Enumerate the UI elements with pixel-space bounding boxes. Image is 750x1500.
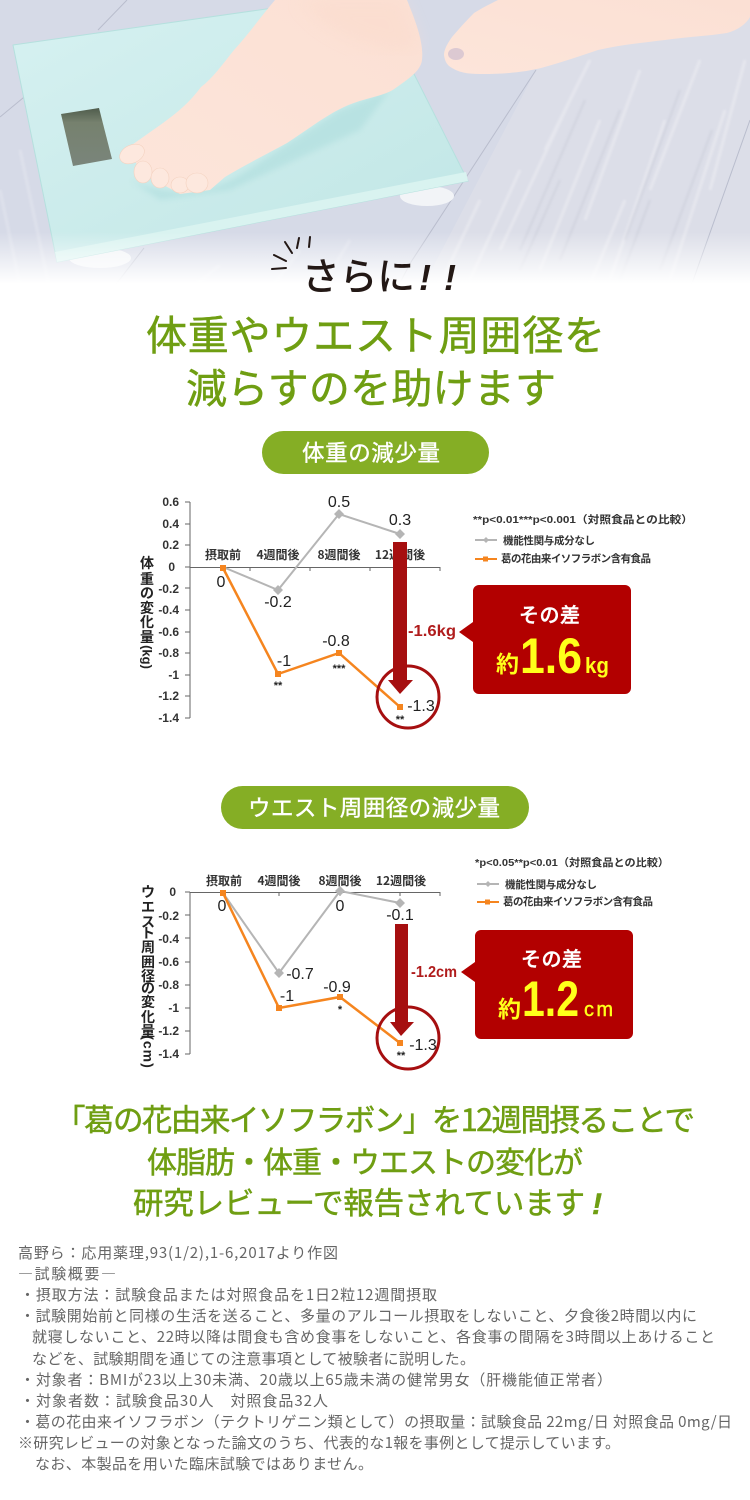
heading: さらに!!: !! [419,257,456,298]
y axis: 0.4 [162,517,179,531]
x axis: 4週間後 [256,546,300,563]
y axis title: 径 [141,966,155,986]
pill heading: body weight reduction: 体重の減少量 [302,436,440,468]
grey series: 0.5 [328,494,350,511]
y axis title [140,882,156,1069]
y axis title: 化 [140,612,154,632]
y axis title: ス [141,912,155,932]
y axis: -1 [168,1001,179,1015]
legend: waist: 機能性関与成分なし [505,878,597,891]
left foot [129,0,422,194]
legend: waist: *p<0.05**p<0.01（対照食品との比較） [475,856,669,869]
study notes text block: 高野ら：応用薬理,93(1/2),1-6,2017より作図 [18,1242,338,1263]
legend: body weight: 機能性関与成分なし [503,534,595,547]
x axis [190,546,440,571]
study notes text block: なお、本製品を用いた臨床試験ではありません。 [35,1453,373,1474]
callout: difference 1.6kg [459,585,631,694]
study notes text block: ・試験開始前と同様の生活を送ること、多量のアルコール摂取をしないこと、夕食後2時間以内に [20,1305,697,1326]
y axis: -0.4 [158,603,179,617]
y axis: -0.2 [158,582,179,596]
y axis title: 重 [140,569,154,589]
y axis: 0 [168,560,175,574]
orange series: -0.9 [323,979,351,996]
grey series: 0 [336,898,345,915]
orange series: 0 [218,898,227,915]
orange series: -1 [277,653,291,670]
right foot [444,0,750,74]
chart: waist change [140,872,457,1069]
x axis [190,872,440,896]
y axis: -1 [168,668,179,682]
legend: waist: 葛の花由来イソフラボン含有食品 [503,895,653,908]
study notes text block: ―試験概要― [18,1263,116,1284]
conclusion heading: ! [592,1188,602,1221]
orange series: -1.3 [409,1037,437,1054]
legend: body weight: 葛の花由来イソフラボン含有食品 [501,552,651,565]
y axis title: 量 [141,1021,155,1041]
heading: さらに!!: さらに [302,246,415,301]
x axis: 4週間後 [257,872,301,889]
legend: body weight: **p<0.01***p<0.001（対照食品との比較） [473,513,693,526]
y axis title: エ [141,897,155,917]
study notes text block: ・対象者数：試験食品30人 対照食品32人 [20,1390,328,1411]
study notes text block: 就寝しないこと、22時以降は間食も含め食事をしないこと、各食事の間隔を3時間以上あけること [32,1326,715,1347]
y axis: 0.6 [162,495,179,509]
callout: difference 1.6kg: 約 [496,645,519,679]
icon: emphasis sparks [272,237,310,269]
orange series [217,565,435,726]
heading: さらに!! [272,237,456,301]
orange series: -1 [280,988,294,1005]
title: 体重やウエスト周囲径を [146,302,605,362]
y axis: -0.4 [158,932,179,946]
y axis: -1.4 [158,711,179,725]
grey series [223,886,414,983]
x axis: 8週間後 [318,872,362,889]
y axis title: 変 [141,992,155,1012]
orange series: *** [333,663,346,675]
y axis: -0.8 [158,646,179,660]
grey series: -0.2 [264,594,292,611]
y axis title: (kg) [140,645,154,669]
y axis title: 量 [140,627,154,647]
y axis title: 体 [140,553,154,573]
x axis: 8週間後 [317,546,361,563]
orange series: 0 [217,574,226,591]
y axis [158,495,190,725]
pill heading: body weight reduction [262,431,489,474]
y axis title [140,553,154,669]
x axis: 摂取前 [206,872,242,889]
callout: difference 1.2cm: その差 [521,943,582,972]
study notes text block [18,1242,732,1474]
title [146,302,605,415]
orange series: ** [274,680,283,692]
photo: feet on a bathroom scale [0,0,750,293]
y axis title: の [141,978,155,998]
toes [116,140,208,193]
y axis: 0.2 [162,538,179,552]
conclusion heading: 「葛の花由来イソフラボン」を12週間摂ることで [55,1096,695,1140]
highlight circle [377,1007,439,1069]
legend: body weight [473,513,693,565]
conclusion heading [55,1096,695,1223]
grey series [223,494,411,611]
y axis: -0.6 [158,625,179,639]
pill heading: waist reduction [221,786,529,829]
y axis title: 変 [140,598,154,618]
y axis: -1.2 [158,1024,179,1038]
y axis title: 化 [141,1007,155,1027]
x axis: 12週間後 [375,546,425,563]
orange series: -1.3 [407,698,435,715]
orange series: * [338,1004,343,1016]
y axis: 0 [169,885,176,899]
y axis title: (cm) [140,1035,156,1069]
y axis: -0.8 [158,978,179,992]
y axis: -1.2 [158,689,179,703]
conclusion heading: 研究レビューで報告されています [133,1179,585,1223]
callout: difference 1.2cm: 約 [498,990,521,1024]
grey series: 0.3 [389,512,411,529]
study notes text block: ※研究レビューの対象となった論文のうち、代表的な1報を事例として提示しています。 [18,1432,620,1453]
x axis: 摂取前 [205,546,241,563]
study notes text block: ・葛の花由来イソフラボン（テクトリゲニン類として）の摂取量：試験食品 22mg/日 対照食品 0mg/日 [20,1411,732,1432]
grey series: -0.7 [286,966,314,983]
orange series: ** [396,714,405,726]
orange series: ** [397,1050,406,1062]
difference arrow [388,542,413,694]
y axis: -1.4 [158,1047,179,1061]
difference label: -1.6kg [408,623,456,640]
title: 減らすのを助けます [186,355,556,415]
callout: difference 1.2cm: cm [584,999,613,1021]
orange series: -0.8 [322,633,350,650]
callout: difference 1.2cm: 1.2 [522,971,579,1027]
callout: difference 1.6kg: その差 [519,599,580,628]
chart: body weight change [140,494,456,728]
callout: difference 1.6kg: kg [585,653,609,678]
y axis title: 囲 [141,952,155,972]
y axis title: ウ [141,882,155,902]
highlight circle [377,666,439,728]
difference label: -1.2cm [411,964,457,981]
y axis: -0.6 [158,955,179,969]
callout: difference 1.2cm [461,930,633,1039]
y axis title: 周 [141,937,155,957]
y axis: -0.2 [158,909,179,923]
y axis [158,885,190,1061]
x axis: 12週間後 [376,872,426,889]
difference arrow [390,924,414,1036]
y axis title: の [140,583,154,603]
study notes text block: ・対象者：BMIが23以上30未満、20歳以上65歳未満の健常男女（肝機能値正常者） [20,1369,612,1390]
y axis title: ト [141,923,155,943]
study notes text block: ・摂取方法：試験食品または対照食品を1日2粒12週間摂取 [20,1284,437,1305]
legend: waist [475,856,669,908]
study notes text block: などを、試験期間を通じての注意事項として被験者に説明した。 [32,1348,475,1369]
callout: difference 1.6kg: 1.6 [520,628,582,684]
grey series: -0.1 [386,907,414,924]
conclusion heading: 体脂肪・体重・ウエストの変化が [147,1138,583,1182]
orange series [218,890,437,1062]
pill heading: waist reduction: ウエスト周囲径の減少量 [248,791,500,823]
